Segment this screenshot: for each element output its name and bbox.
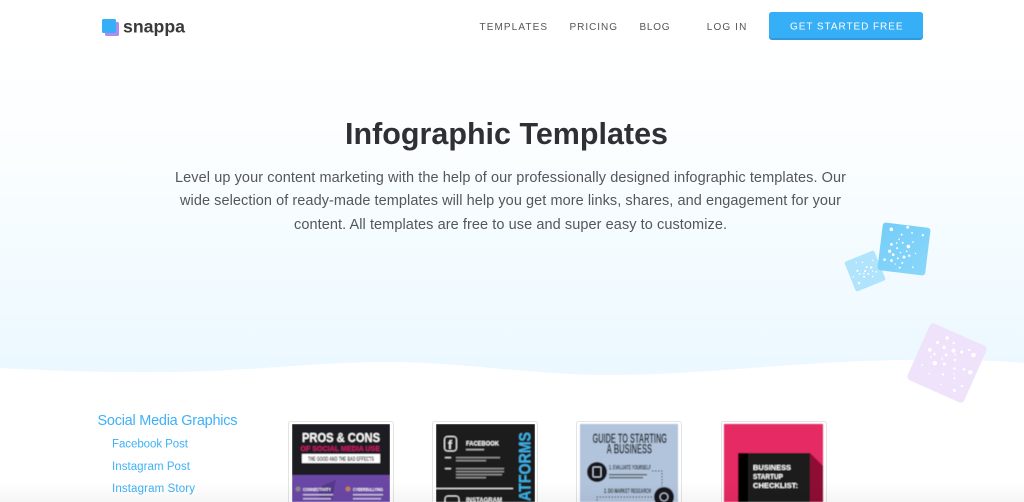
decoration: lilac square [906,322,988,404]
template card: pros and cons: OF SOCIAL MEDIA USE [300,444,380,453]
intro text: content. All templates are free to use and super easy to customize. [294,217,727,233]
template card: platforms: f [448,438,453,452]
sidebar category list [98,413,238,495]
sidebar link: instagram post: Instagram Post [112,461,191,473]
navigation [480,22,746,33]
intro text [175,170,846,233]
decoration: blue square [877,222,931,276]
decoration: small light blue square [844,250,886,292]
template card: guide to starting a business: 1. EVALUATE YOURSELF [609,464,651,472]
logo wordmark: snappa [123,16,185,36]
template card: business startup checklist [722,422,826,502]
nav: pricing: PRICING [570,22,617,33]
template card: pros and cons: PROS & CONS [302,431,380,445]
template card: platforms: ATFORMS [516,432,534,501]
nav: log in: LOG IN [707,22,746,33]
icon: snappa squares [102,19,119,36]
template card: guide to starting a business: 2. DO MARKET RESEARCH [604,488,651,495]
sidebar link: facebook post: Facebook Post [112,439,189,451]
template card: business startup checklist: CHECKLIST: [753,481,798,490]
template card: pros and cons [288,422,394,502]
template card: business startup checklist: BUSINESS [753,463,791,472]
nav: templates: TEMPLATES [480,22,547,33]
template card: guide to starting a business [576,422,682,502]
template card: business startup checklist: STARTUP [753,472,783,481]
intro text: Level up your content marketing with the help of our professionally designed infographic templates. Our [175,170,846,186]
button: get started free: GET STARTED FREE [790,21,903,32]
template card: pros and cons: CONNECTIVITY [303,487,331,492]
button: get started free [769,12,923,40]
title: Infographic Templates [345,116,668,151]
template card: guide to starting a business: A BUSINESS [606,442,652,456]
template card: guide to starting a business: GUIDE TO STARTING [592,431,667,446]
sidebar heading: Social Media Graphics [98,413,238,429]
sidebar link: instagram story: Instagram Story [112,483,195,495]
intro text: wide selection of ready-made templates will help you get more links, shares, and engagement for your [179,193,841,209]
template card: pros and cons: THE GOOD AND THE BAD EFFECTS [308,457,374,463]
template card: platforms [432,422,538,502]
hero background with wave [0,40,1024,400]
template card: platforms: FACEBOOK [466,442,500,448]
nav: blog: BLOG [640,22,670,33]
template card: pros and cons: CYBERBULLYING [353,487,383,492]
logo [102,16,185,36]
